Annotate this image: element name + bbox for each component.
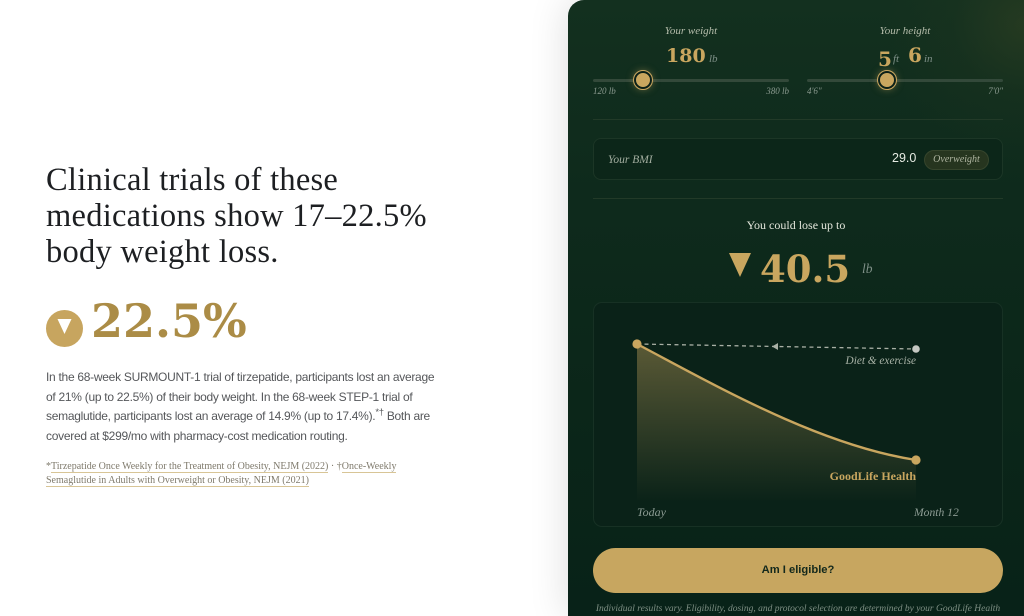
start point — [632, 339, 642, 349]
BMI value: 29.0 — [892, 151, 916, 165]
BMI panel — [593, 138, 1003, 180]
goodlife curve — [637, 344, 916, 460]
panel: calculator card — [568, 0, 1024, 616]
label: your weight: Your weight — [665, 25, 717, 37]
citations — [46, 461, 396, 487]
icon: down triangle badge — [46, 310, 83, 347]
icon: down triangle — [729, 253, 751, 277]
diet end point — [912, 345, 920, 353]
body text — [46, 370, 434, 443]
body text: semaglutide, participants lost an average of 14.9% (up to 17.4%).*† Both are — [46, 407, 430, 423]
unit: lb: lb — [709, 53, 718, 65]
range max: 380 lb — [766, 86, 789, 96]
axis: month 12: Month 12 — [913, 506, 959, 519]
citations: Semaglutide in Adults with Overweight or Obesity, NEJM (2021) — [46, 475, 309, 486]
disclaimer: Individual results vary. Eligibility, dosing, and protocol selection are determined by your GoodLife Health — [596, 604, 1000, 614]
range max: 7'0" — [988, 86, 1003, 96]
chart panel — [593, 302, 1003, 527]
heading: medications show 17–22.5% — [46, 198, 427, 234]
label: goodlife: GoodLife Health — [830, 469, 916, 483]
diet line — [637, 344, 916, 349]
range min: 120 lb — [593, 86, 616, 96]
BMI label: Your BMI — [608, 154, 653, 166]
slider track — [593, 79, 789, 82]
BMI badge: Overweight — [933, 154, 980, 165]
big stat: 22.5% — [91, 294, 247, 348]
body text: covered at $299/mo with pharmacy-cost medication routing. — [46, 429, 348, 443]
panel: left copy — [46, 162, 434, 487]
heading: Clinical trials of these — [46, 162, 338, 198]
BMI badge — [924, 150, 989, 170]
heading: body weight loss. — [46, 234, 279, 270]
value: 40.5 — [760, 247, 850, 291]
axis: today: Today — [637, 505, 667, 519]
label: you could lose: You could lose up to — [747, 218, 845, 232]
value: feet: 5 — [878, 47, 892, 71]
body text: of 21% (up to 22.5%) of their body weight. In the 68-week STEP-1 trial of — [46, 390, 412, 404]
label: your height: Your height — [880, 25, 930, 37]
unit: lb — [862, 261, 873, 276]
goodlife end point — [911, 455, 921, 465]
slider thumb — [878, 71, 896, 89]
citations: *Tirzepatide Once Weekly for the Treatment of Obesity, NEJM (2022) · †Once-Weekly — [46, 461, 396, 472]
slider thumb — [634, 71, 652, 89]
height control — [807, 25, 1003, 96]
heading — [46, 162, 427, 270]
line chart — [632, 339, 959, 519]
slider track — [807, 79, 1003, 82]
label: diet: Diet & exercise — [845, 355, 916, 367]
value: 180 lb: 180 — [666, 45, 706, 67]
value: inches: 6 — [908, 43, 922, 67]
weight control — [593, 25, 789, 96]
CTA button: Am I eligible? — [762, 564, 834, 576]
range min: 4'6" — [807, 86, 822, 96]
result: pounds lost — [729, 247, 873, 291]
area fill — [637, 344, 916, 502]
arrow marker — [772, 343, 778, 350]
body text: In the 68-week SURMOUNT-1 trial of tirzepatide, participants lost an average — [46, 370, 434, 384]
unit: ft: ft — [893, 53, 899, 65]
CTA button — [593, 548, 1003, 593]
unit: in: in — [924, 53, 933, 65]
